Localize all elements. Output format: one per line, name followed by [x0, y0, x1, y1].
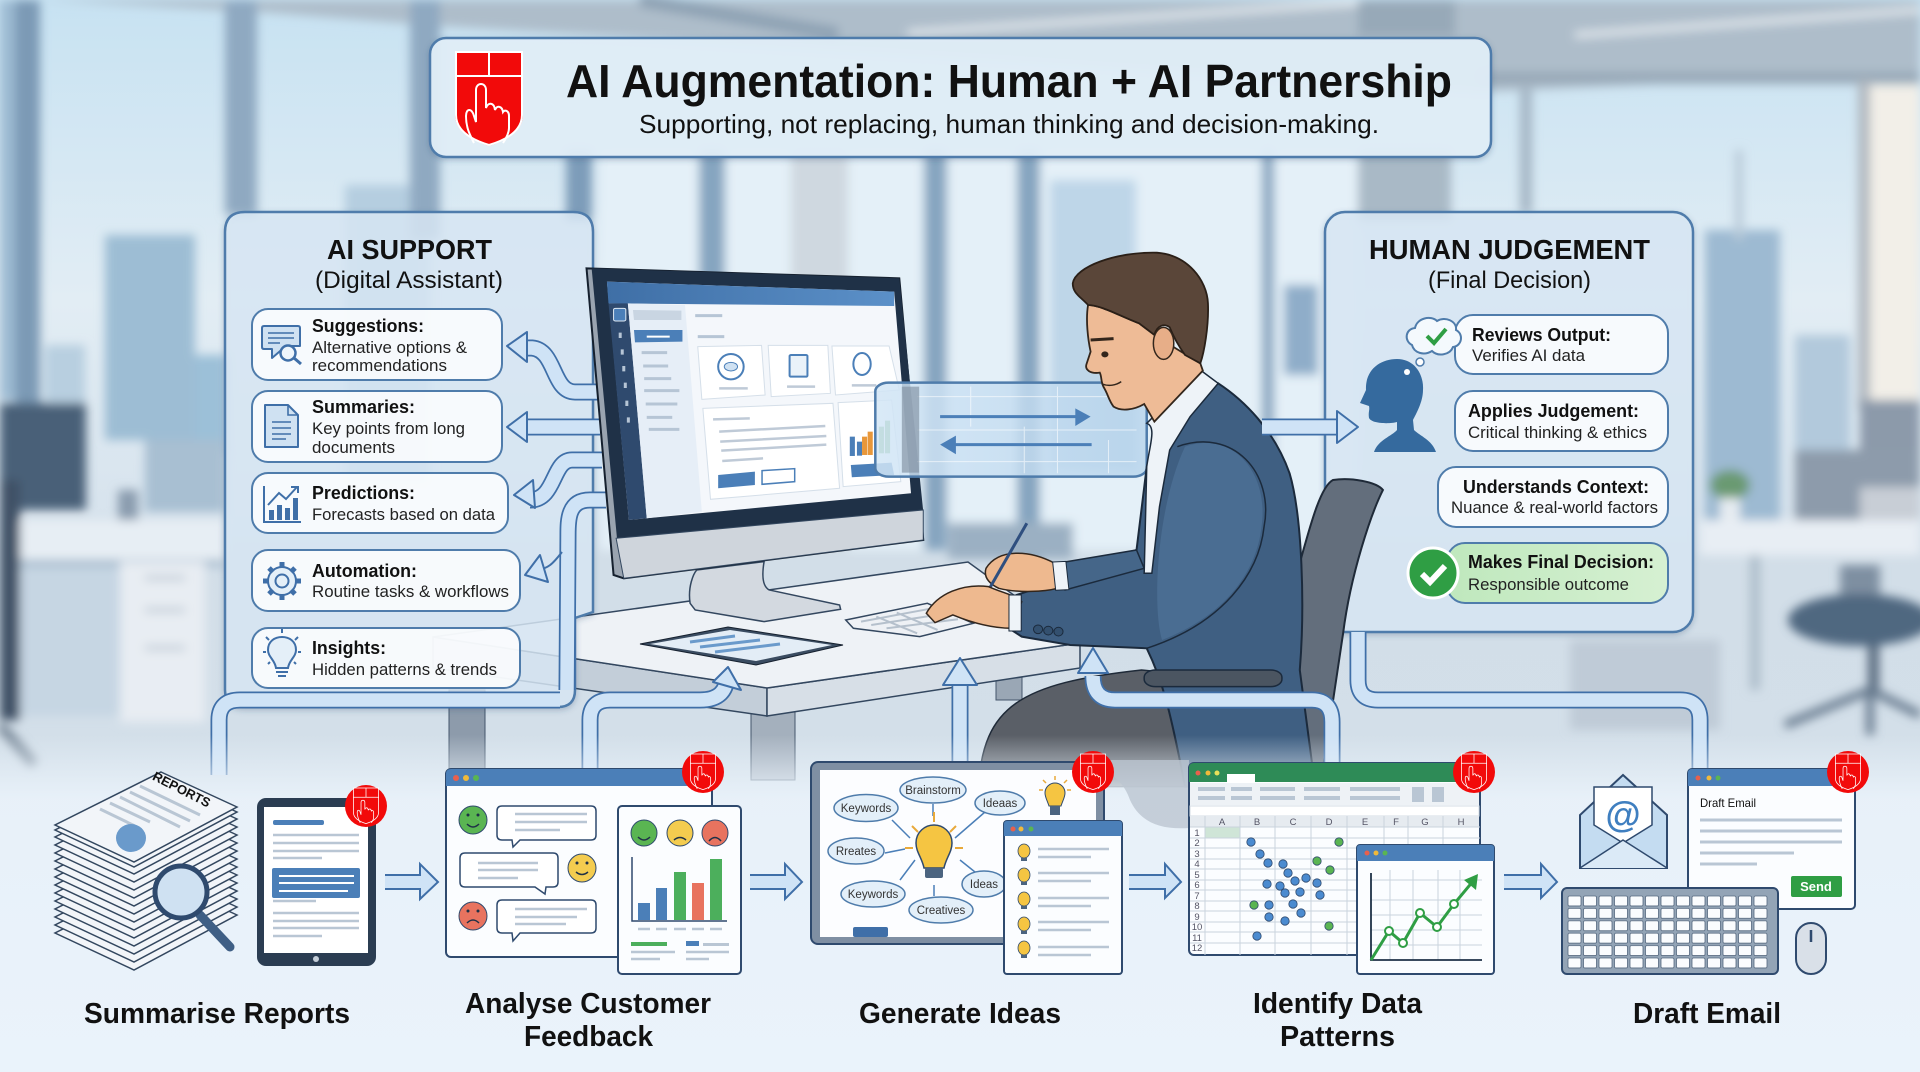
- arrow: step 1 to 2: [385, 864, 438, 899]
- badge: [1827, 751, 1869, 793]
- label: Analyse Customer: [465, 988, 711, 1020]
- icon: spreadsheet scatter: 4: [1194, 859, 1200, 870]
- icon: spreadsheet scatter: 7: [1194, 891, 1200, 902]
- label: Summarise Reports: [84, 998, 350, 1030]
- icon: light bulb: [263, 629, 301, 676]
- icon: whiteboard mind map: Brainstorm: [905, 785, 961, 797]
- card: makes final decision: Responsible outcome: [1468, 576, 1629, 594]
- card: makes final decision: [1447, 543, 1668, 603]
- icon: spreadsheet scatter: 2: [1194, 838, 1200, 849]
- arrow: step 4 to 5: [1504, 864, 1557, 898]
- tablet on desk: [640, 627, 843, 665]
- icon: email draft window: [1688, 769, 1855, 909]
- panel: human judgement: [1325, 212, 1693, 632]
- face and neck: [1086, 305, 1203, 422]
- icon: report stack with magnifier: REPORTS: [150, 768, 213, 811]
- card: applies judgement: Critical thinking & ethics: [1468, 424, 1647, 442]
- logo: red shield with hand: [455, 52, 523, 146]
- subtitle: Supporting, not replacing, human thinking and decision-making.: [639, 109, 1379, 139]
- card: summaries: [252, 391, 502, 462]
- desk: [433, 562, 1080, 780]
- subheading: final decision: (Final Decision): [1428, 267, 1591, 294]
- card: suggestions: Suggestions:: [312, 316, 424, 336]
- icon: spreadsheet scatter: E: [1362, 817, 1368, 828]
- ceiling: [40, 0, 1920, 92]
- left desk: [145, 440, 225, 512]
- jacket: [1012, 383, 1315, 787]
- icon: spreadsheet scatter: 12: [1192, 943, 1202, 954]
- chair: [1284, 479, 1383, 787]
- label: Identify Data: [1253, 988, 1423, 1020]
- card: reviews output: Verifies AI data: [1472, 347, 1586, 365]
- arm rest: [1144, 670, 1282, 687]
- card: reviews output: Reviews Output:: [1472, 325, 1611, 345]
- ear: [1153, 327, 1174, 359]
- arrows: to human judgement and data patterns: [1078, 411, 1700, 780]
- data exchange overlay: [875, 383, 1147, 477]
- badge: [682, 751, 724, 793]
- icon: spreadsheet scatter: 11: [1192, 933, 1202, 944]
- shirt: [1144, 370, 1218, 573]
- icon: tablet summary: [257, 798, 376, 966]
- card: predictions: [252, 473, 508, 533]
- icon: whiteboard mind map: Ideas: [970, 879, 998, 891]
- mullions and columns: [0, 0, 15, 400]
- card: predictions: Predictions:: [312, 483, 415, 503]
- card: insights: [252, 628, 520, 688]
- badge: [1453, 751, 1495, 793]
- arrows: monitor to AI support cards: [507, 332, 606, 690]
- icon: idea list window: [1004, 821, 1122, 974]
- keyboard: [846, 603, 973, 637]
- window glass areas and towers: [600, 150, 1360, 550]
- icon: whiteboard mind map: Keywords: [848, 889, 898, 901]
- monitor: [587, 268, 923, 622]
- icon: spreadsheet scatter: G: [1421, 817, 1429, 828]
- icon: email draft window: Send: [1800, 879, 1832, 894]
- task 1: summarise reports: [55, 768, 387, 1030]
- icon: feedback window: [446, 769, 712, 957]
- icon: spreadsheet scatter: B: [1254, 817, 1260, 828]
- card: automation: Automation:: [312, 561, 417, 581]
- icon: gear: [263, 562, 301, 600]
- icon: whiteboard mind map: Creatives: [917, 905, 966, 917]
- icon: spreadsheet scatter: 1: [1194, 828, 1200, 839]
- card: applies judgement: [1455, 391, 1668, 451]
- hands and pen: [926, 523, 1069, 636]
- icon: envelope: [1580, 775, 1667, 868]
- icon: spreadsheet scatter: 10: [1192, 922, 1202, 933]
- icon: whiteboard mind map: Rreates: [836, 846, 876, 858]
- card: summaries: Summaries:: [312, 397, 415, 417]
- icon: spreadsheet scatter: D: [1326, 817, 1333, 828]
- icon: head silhouette with thought bubble: [1360, 318, 1461, 452]
- arrow: step 2 to 3: [750, 864, 802, 899]
- man at desk with keyboard: [846, 253, 1383, 787]
- task 2: analyse customer feedback: [446, 751, 741, 1053]
- icon: document: [265, 405, 298, 447]
- right desk: [1860, 400, 1920, 450]
- card: understands context: Understands Context:: [1463, 477, 1649, 497]
- icon: spreadsheet scatter: F: [1393, 817, 1399, 828]
- title: AI Augmentation: Human + AI Partnership: [566, 55, 1452, 107]
- card: understands context: [1438, 467, 1668, 527]
- card: summaries: documents: [312, 439, 395, 457]
- card: makes final decision: Makes Final Decision:: [1468, 552, 1654, 572]
- arrow: step 3 to 4: [1129, 864, 1181, 898]
- card: insights: Insights:: [312, 638, 386, 658]
- heading: AI support: AI SUPPORT: [327, 234, 492, 265]
- badge: [1072, 751, 1114, 793]
- task 4: identify data patterns: [1189, 751, 1495, 1053]
- card: insights: Hidden patterns & trends: [312, 661, 497, 679]
- icon: speech bubble with magnifier: [262, 326, 301, 364]
- icon: spreadsheet scatter: C: [1290, 817, 1297, 828]
- icon: mouse: [1796, 923, 1826, 974]
- icon: sentiment bar chart: [618, 806, 741, 974]
- icon: spreadsheet scatter: 5: [1194, 870, 1200, 881]
- task 2: analyse customer feedback: Feedback: [524, 1021, 654, 1053]
- icon: envelope: @: [1605, 794, 1641, 835]
- subheading: digital assistant: (Digital Assistant): [315, 267, 503, 294]
- heading: human judgement: HUMAN JUDGEMENT: [1369, 234, 1650, 265]
- icon: spreadsheet scatter: 8: [1194, 901, 1200, 912]
- task 4: identify data patterns: Patterns: [1280, 1021, 1395, 1053]
- card: suggestions: [252, 309, 502, 380]
- card: predictions: Forecasts based on data: [312, 506, 496, 524]
- panel: AI support: [225, 212, 593, 707]
- card: automation: Routine tasks & workflows: [312, 583, 509, 601]
- icon: report stack with magnifier: [55, 768, 237, 970]
- icon: spreadsheet scatter: 6: [1194, 880, 1200, 891]
- icon: spreadsheet scatter: H: [1458, 817, 1465, 828]
- icon: spreadsheet scatter: A: [1219, 817, 1226, 828]
- icon: whiteboard mind map: Ideaas: [983, 798, 1018, 810]
- icon: trend line window: [1357, 845, 1494, 974]
- hair: [1073, 253, 1208, 363]
- card: summaries: Key points from long: [312, 420, 465, 438]
- icon: spreadsheet scatter: 3: [1194, 849, 1200, 860]
- icon: growth chart: [264, 486, 301, 522]
- card: understands context: Nuance & real-world factors: [1451, 499, 1658, 517]
- card: suggestions: Alternative options &: [312, 339, 467, 357]
- badge: [345, 785, 387, 827]
- task 3: generate ideas: [811, 751, 1122, 1030]
- icon: whiteboard mind map: [811, 762, 1104, 944]
- icon: whiteboard mind map: Keywords: [841, 803, 891, 815]
- label: Generate Ideas: [859, 998, 1061, 1030]
- title banner: [430, 38, 1491, 157]
- card: automation: [252, 550, 520, 611]
- icon: spreadsheet scatter: [1189, 763, 1480, 955]
- icon: green check: [1408, 548, 1458, 598]
- label: Draft Email: [1633, 998, 1781, 1030]
- trousers: [978, 670, 1213, 787]
- icon: spreadsheet scatter: 9: [1194, 912, 1200, 923]
- task 5: draft email: [1562, 751, 1869, 1030]
- card: reviews output: [1455, 315, 1668, 374]
- icon: email draft window: Draft Email: [1700, 796, 1756, 810]
- card: applies judgement: Applies Judgement:: [1468, 401, 1639, 421]
- icon: keyboard: [1562, 888, 1778, 974]
- arrows: tasks up to workspace: [219, 658, 977, 780]
- card: suggestions: recommendations: [312, 357, 447, 375]
